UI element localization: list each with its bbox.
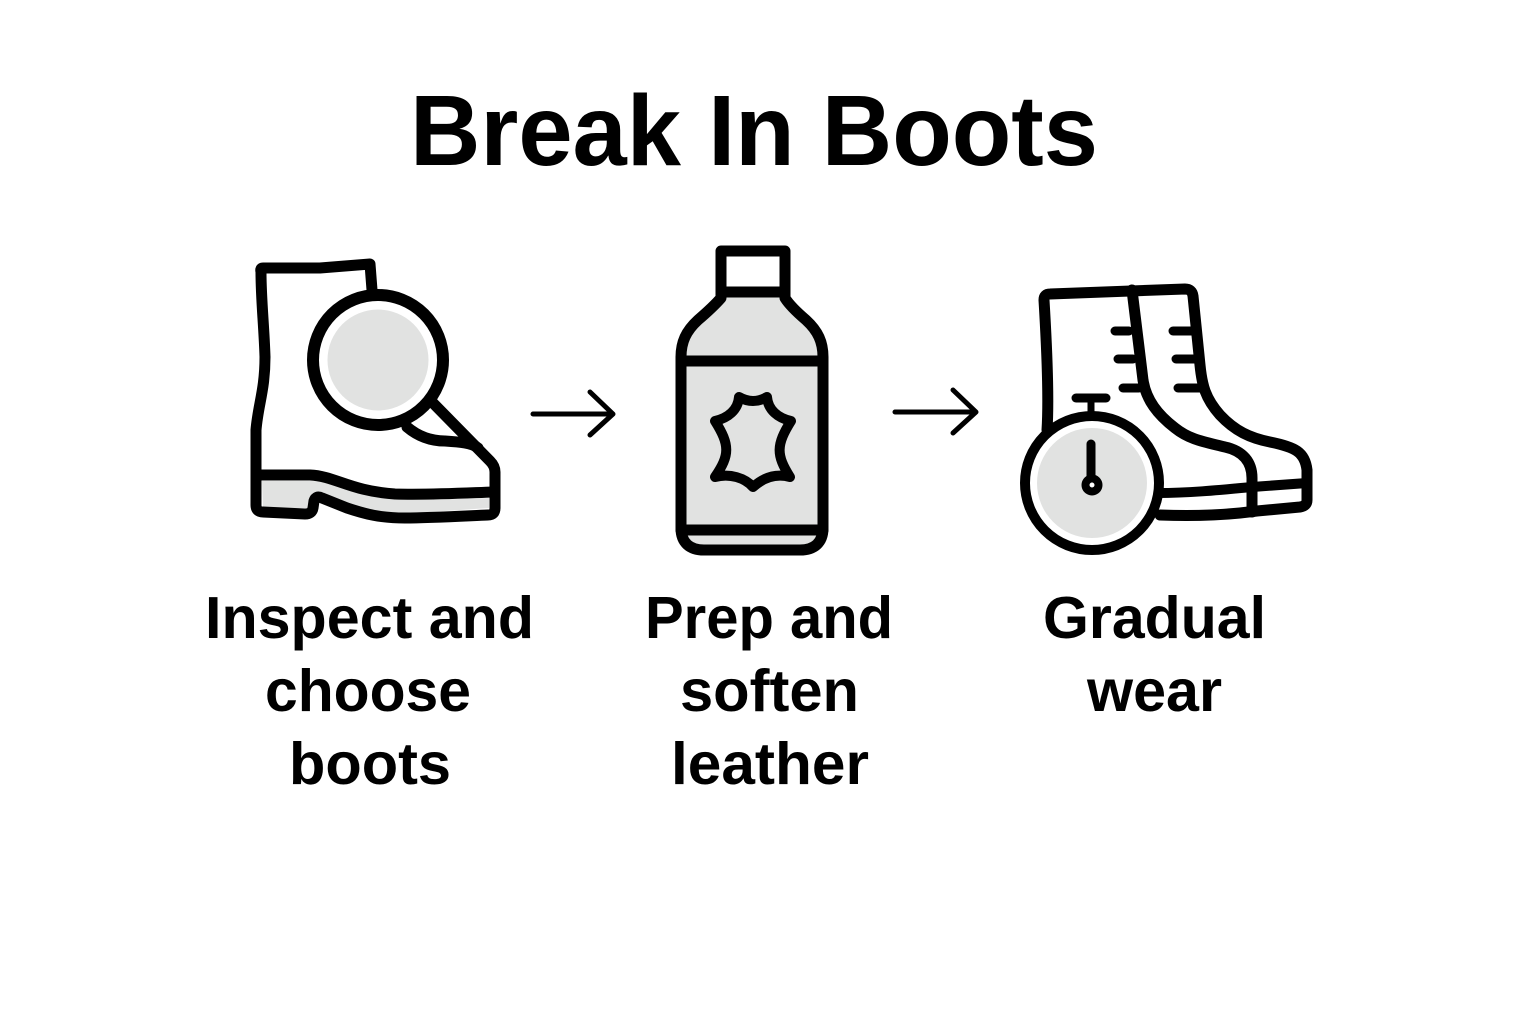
label: step 3: Gradual bbox=[1043, 585, 1266, 651]
icon: boots with stopwatch bbox=[1025, 289, 1307, 550]
stopwatch bbox=[1025, 398, 1159, 550]
label: step 3 bbox=[1043, 585, 1266, 724]
label: step 2: leather bbox=[671, 731, 869, 797]
arrow: step 1 to step 2 bbox=[533, 392, 613, 435]
label: step 2: Prep and bbox=[645, 585, 893, 651]
label: step 2 bbox=[645, 585, 893, 797]
label: step 1: choose bbox=[265, 658, 471, 724]
icon: leather conditioner bottle bbox=[681, 251, 823, 550]
title: Break In Boots bbox=[410, 75, 1098, 187]
label: step 1: Inspect and bbox=[205, 585, 534, 651]
label: step 3: wear bbox=[1086, 658, 1222, 724]
leather hide symbol bbox=[715, 397, 791, 487]
label: step 1: boots bbox=[289, 731, 451, 797]
label: step 1 bbox=[205, 585, 534, 797]
icon: boot with magnifying glass bbox=[256, 264, 495, 518]
label: step 2: soften bbox=[680, 658, 859, 724]
arrow: step 2 to step 3 bbox=[895, 390, 976, 433]
magnifier lens bbox=[313, 295, 443, 425]
